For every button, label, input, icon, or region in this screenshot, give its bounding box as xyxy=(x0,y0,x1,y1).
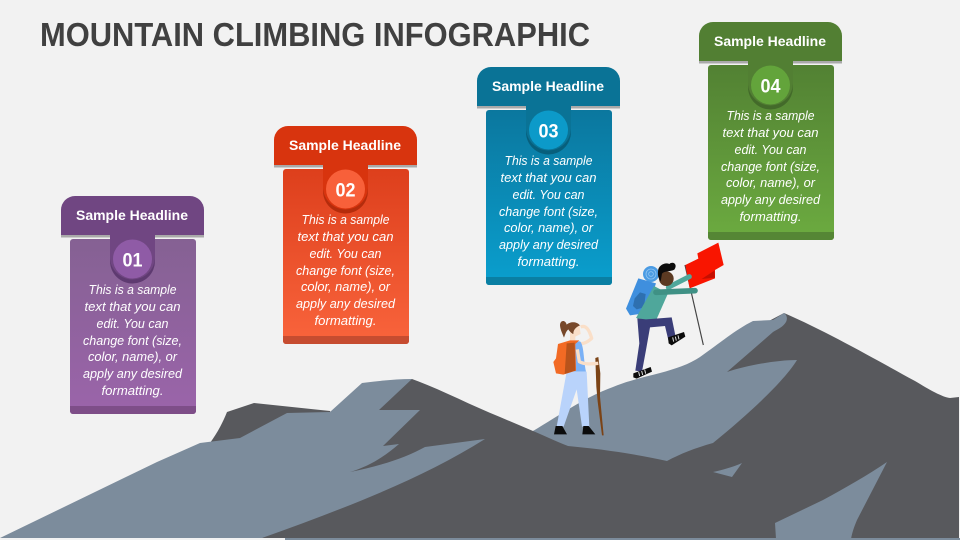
main dark mountain mass xyxy=(262,313,959,538)
card footer strip xyxy=(708,232,834,240)
number badge xyxy=(113,240,152,278)
number badge xyxy=(751,66,790,104)
head xyxy=(659,271,674,286)
flag pole xyxy=(685,265,703,345)
panel: step 03 blue xyxy=(477,67,620,285)
card body xyxy=(70,239,196,414)
shoes xyxy=(668,332,685,345)
header shadow xyxy=(699,61,842,64)
tab xyxy=(110,230,155,280)
header shadow xyxy=(477,106,620,108)
card footer strip xyxy=(486,277,612,285)
body text: text that you can xyxy=(298,230,394,244)
title: MOUNTAIN CLIMBING INFOGRAPHIC xyxy=(40,16,590,53)
number: 02 xyxy=(336,180,356,202)
body text: This is a sample xyxy=(726,109,815,123)
body text: change font (size, xyxy=(296,264,395,278)
illustration: male climber holding red flag xyxy=(626,243,724,379)
body text: This is a sample xyxy=(302,213,390,227)
body text: apply any desired xyxy=(83,367,183,381)
card footer strip xyxy=(70,406,196,414)
tab crescent xyxy=(110,238,155,284)
number badge xyxy=(529,110,568,150)
card body xyxy=(708,65,834,240)
headline: Sample Headline xyxy=(714,33,826,49)
water bottle xyxy=(633,292,646,309)
shirt xyxy=(566,341,586,372)
illustration: female hiker with walking stick xyxy=(553,321,604,435)
tab crescent xyxy=(323,168,368,214)
boots xyxy=(554,426,595,434)
back ridge, dark xyxy=(210,403,345,450)
backpack xyxy=(553,340,579,375)
header shadow xyxy=(274,165,417,168)
body text: formatting. xyxy=(314,314,376,328)
walking stick xyxy=(595,357,604,435)
front arm xyxy=(656,291,695,292)
header shadow xyxy=(61,235,204,238)
tab crescent xyxy=(748,64,793,110)
body text: apply any desired xyxy=(499,238,599,252)
tab xyxy=(748,56,793,106)
small rock facet xyxy=(713,463,742,477)
hair xyxy=(658,263,676,281)
number: 01 xyxy=(122,250,143,272)
headline: Sample Headline xyxy=(492,78,604,94)
body text: edit. You can xyxy=(734,143,807,157)
tab xyxy=(323,160,368,210)
body text: color, name), or xyxy=(301,280,391,294)
neck and face xyxy=(570,325,581,343)
base line xyxy=(285,538,960,540)
card body xyxy=(486,110,612,285)
body text: text that you can xyxy=(500,171,597,185)
body text: change font (size, xyxy=(499,205,598,219)
flag xyxy=(685,243,724,288)
panel: step 01 purple xyxy=(61,196,204,414)
tab crescent xyxy=(526,110,571,154)
header xyxy=(274,126,417,165)
body text: formatting. xyxy=(518,255,580,269)
body text: This is a sample xyxy=(88,283,177,297)
bedroll xyxy=(643,266,659,282)
body text: change font (size, xyxy=(721,160,820,174)
headline: Sample Headline xyxy=(289,137,401,153)
summit slope, light xyxy=(533,313,797,461)
tab xyxy=(526,101,571,150)
pants xyxy=(557,372,589,427)
body text: text that you can xyxy=(722,126,819,140)
number: 03 xyxy=(538,122,558,142)
lower right facet xyxy=(775,462,887,539)
card body xyxy=(283,169,409,344)
header xyxy=(61,196,204,235)
torso xyxy=(636,286,668,322)
panel: step 02 red xyxy=(274,126,417,344)
body text: edit. You can xyxy=(512,188,585,202)
body text: edit. You can xyxy=(96,317,169,331)
body text: color, name), or xyxy=(504,221,594,235)
card footer strip xyxy=(283,336,409,344)
backpack xyxy=(626,278,656,315)
headline: Sample Headline xyxy=(76,207,188,223)
body text: text that you can xyxy=(84,300,181,314)
header xyxy=(477,67,620,106)
body text: color, name), or xyxy=(726,176,816,190)
number: 04 xyxy=(760,76,781,98)
body text: formatting. xyxy=(740,210,802,224)
body text: change font (size, xyxy=(83,334,182,348)
trousers xyxy=(635,317,676,372)
body text: This is a sample xyxy=(504,154,593,168)
body text: edit. You can xyxy=(310,247,382,261)
hair xyxy=(560,321,580,338)
body text: apply any desired xyxy=(296,297,396,311)
header xyxy=(699,22,842,61)
back arm xyxy=(668,277,689,287)
panel: step 04 green xyxy=(699,22,842,240)
flag shadow fold xyxy=(702,271,715,279)
foreground slope, light xyxy=(0,379,485,538)
illustration: mountains xyxy=(0,313,960,540)
number badge xyxy=(326,170,365,208)
raised arm xyxy=(577,326,592,344)
body text: apply any desired xyxy=(721,193,821,207)
lower arm xyxy=(577,349,598,364)
shoe stripes xyxy=(639,335,679,376)
body text: formatting. xyxy=(102,384,164,398)
body text: color, name), or xyxy=(88,350,178,364)
backpack side shading xyxy=(565,343,575,374)
